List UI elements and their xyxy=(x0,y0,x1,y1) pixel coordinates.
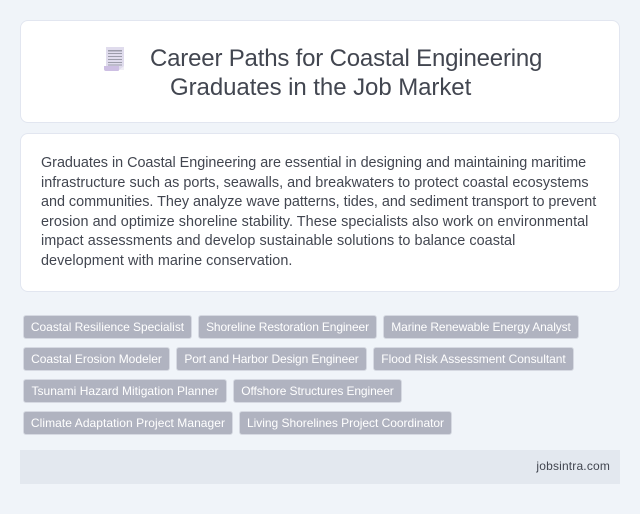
description text: impact assessments and develop sustainable solutions to balance coastal xyxy=(41,233,515,249)
tag xyxy=(176,347,367,371)
tag xyxy=(383,315,579,339)
footer text: jobsintra.com xyxy=(536,459,610,473)
tag: Port and Harbor Design Engineer xyxy=(184,352,359,366)
description text xyxy=(41,155,596,269)
title xyxy=(150,45,542,101)
tag xyxy=(23,411,233,435)
description text: infrastructure such as ports, seawalls, and breakwaters to protect coastal ecosystems xyxy=(41,175,589,191)
tag: Coastal Resilience Specialist xyxy=(31,320,184,334)
description panel xyxy=(20,133,620,292)
tag: Flood Risk Assessment Consultant xyxy=(381,352,566,366)
tag xyxy=(233,379,402,403)
tag xyxy=(198,315,377,339)
description text: and communities. They analyze wave patterns, tides, and sediment transport to prevent xyxy=(41,194,596,210)
tag: Marine Renewable Energy Analyst xyxy=(391,320,571,334)
tag: Shoreline Restoration Engineer xyxy=(206,320,369,334)
description text: Graduates in Coastal Engineering are essential in designing and maintaining maritime xyxy=(41,155,586,171)
title: Graduates in the Job Market xyxy=(170,74,471,101)
description text: erosion and optimize shoreline stability. These specialists also work on environmental xyxy=(41,214,588,230)
footer bar xyxy=(20,450,620,484)
tag xyxy=(373,347,574,371)
tag: Tsunami Hazard Mitigation Planner xyxy=(31,384,219,398)
tag: Climate Adaptation Project Manager xyxy=(31,416,225,430)
tag xyxy=(23,347,170,371)
header panel xyxy=(20,20,620,123)
tag: Coastal Erosion Modeler xyxy=(31,352,162,366)
tag xyxy=(23,315,192,339)
tag: Offshore Structures Engineer xyxy=(241,384,394,398)
tag: Living Shorelines Project Coordinator xyxy=(247,416,444,430)
title: Career Paths for Coastal Engineering xyxy=(150,45,542,72)
icon: document scroll xyxy=(104,47,124,71)
tag xyxy=(239,411,452,435)
career tags xyxy=(23,315,579,435)
description text: development with marine conservation. xyxy=(41,253,292,269)
tag xyxy=(23,379,227,403)
